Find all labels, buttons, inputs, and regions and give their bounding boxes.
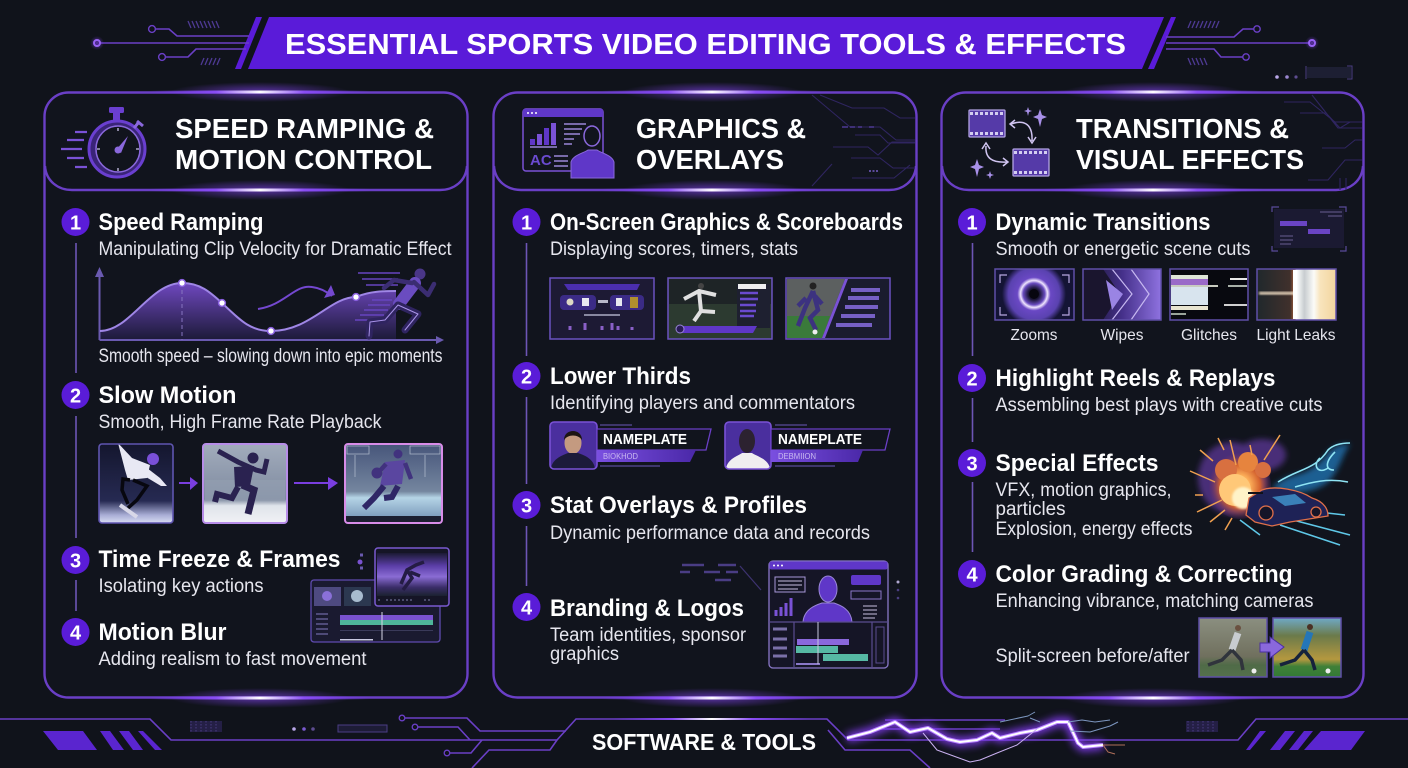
item: motion blur: Motion Blur (98, 619, 226, 646)
item: motion blur: Adding realism to fast movement (98, 649, 367, 670)
item: branding and logos: Branding & Logos (550, 595, 744, 622)
panel bottom glows (150, 688, 1263, 708)
item: branding and logos: Team identities, sponsor (550, 625, 747, 646)
item: motion blur (62, 618, 367, 670)
item: motion blur: 4 (70, 622, 82, 644)
lower third nameplate one: NAMEPLATE (603, 431, 687, 448)
icon: film frames with arrows and sparkles (969, 107, 1049, 179)
small transition widget (1272, 207, 1346, 251)
item: slow motion: 2 (70, 386, 81, 408)
item: special effects: 3 (966, 454, 978, 476)
item: highlight reels: Assembling best plays with creative cuts (996, 395, 1322, 416)
icon: stopwatch (61, 107, 145, 177)
chart caption: Smooth speed – slowing down into epic moments (98, 346, 442, 367)
panel heading: VISUAL EFFECTS (1076, 144, 1304, 175)
lower third nameplate two (725, 422, 890, 469)
title banner: ESSENTIAL SPORTS VIDEO EDITING TOOLS & EFFECTS (285, 29, 1126, 61)
item: special effects: VFX, motion graphics, (996, 480, 1172, 501)
item: on-screen graphics: 1 (521, 212, 532, 234)
thumbnail labels (1010, 327, 1336, 344)
item: highlight reels (958, 364, 1322, 442)
frame: ice skater (203, 444, 287, 523)
item: highlight reels: Highlight Reels & Replays (996, 365, 1276, 392)
footer left stripes (43, 731, 162, 750)
item: color grading: Split-screen before/after (996, 646, 1190, 667)
panel: graphics and overlays (494, 82, 916, 698)
item: speed ramping: Speed Ramping (98, 209, 264, 236)
editor interface mockup (311, 548, 449, 642)
panel header: graphics (494, 82, 916, 200)
icon: runner (369, 268, 434, 336)
item: dynamic transitions: Dynamic Transitions (996, 209, 1210, 236)
circuit decoration left of title (90, 21, 249, 65)
image sequence: slow motion frames (99, 443, 442, 523)
lower third nameplate one: BIOKHOD (603, 452, 638, 461)
photo: after (1273, 618, 1341, 677)
panel heading (636, 113, 806, 175)
panel: transitions and visual effects (942, 82, 1364, 698)
item: stat overlays (512, 491, 870, 586)
footer label: SOFTWARE & TOOLS (592, 729, 816, 755)
thumbnail: player with stats list (668, 278, 772, 339)
thumbnail labels: Zooms (1010, 327, 1058, 344)
panel heading (175, 113, 434, 175)
item: speed ramping: Manipulating Clip Velocity for Dramatic Effect (98, 239, 452, 260)
item: color grading: 4 (966, 564, 978, 586)
item: lower thirds: Lower Thirds (550, 363, 691, 390)
thumbnail labels: Wipes (1100, 327, 1144, 344)
item: branding and logos: 4 (521, 598, 533, 620)
icon: graphics screen with player (523, 109, 614, 178)
item: color grading (958, 560, 1314, 667)
item: on-screen graphics: Displaying scores, timers, stats (550, 239, 798, 260)
thumbnails: scoreboard overlays (550, 278, 890, 339)
panel heading: TRANSITIONS & (1076, 113, 1289, 144)
item: lower thirds: Identifying players and commentators (550, 393, 855, 414)
item: stat overlays: Stat Overlays & Profiles (550, 492, 807, 519)
footer small widgets (190, 721, 1218, 732)
item: branding and logos: graphics (550, 644, 619, 665)
item: on-screen graphics: On-Screen Graphics & Scoreboards (550, 209, 903, 236)
item: on-screen graphics (512, 208, 903, 356)
footer bar (0, 712, 1408, 768)
icon: graphics screen with player: AC (530, 152, 552, 169)
item: special effects: Explosion, energy effects (996, 519, 1192, 540)
panel heading: OVERLAYS (636, 144, 784, 175)
footer right stripes (1246, 731, 1365, 750)
thumbnail labels: Light Leaks (1256, 327, 1336, 344)
item: slow motion (62, 381, 382, 538)
item: stat overlays: 3 (521, 496, 532, 518)
item: time freeze and frames (62, 546, 340, 611)
panel header: transitions (942, 82, 1363, 200)
item: branding and logos (512, 593, 747, 665)
thumbnail: scoreboard (550, 278, 654, 339)
item: time freeze and frames: Time Freeze & Frames (98, 546, 340, 573)
panel heading: GRAPHICS & (636, 113, 806, 144)
lightning effect (847, 712, 1125, 762)
panel heading (1076, 113, 1304, 175)
illustration: explosion and race car (1190, 435, 1350, 545)
frame: jumping skater (99, 443, 173, 523)
broadcast interface mockup (680, 561, 900, 668)
frame: basketball player (345, 444, 442, 523)
photo: before (1199, 618, 1267, 677)
title banner (235, 17, 1176, 69)
item: special effects (958, 449, 1192, 552)
lower third nameplate two: DEBMIION (778, 452, 816, 461)
thumbnail: glitches (1170, 269, 1248, 320)
item: special effects: Special Effects (996, 450, 1158, 477)
circuit decoration right of title (1166, 21, 1352, 79)
item: dynamic transitions: Smooth or energetic scene cuts (996, 239, 1250, 260)
lower third nameplate two: NAMEPLATE (778, 431, 862, 448)
thumbnail: wipes (1083, 269, 1161, 320)
thumbnail labels: Glitches (1181, 327, 1237, 344)
panel heading: MOTION CONTROL (175, 144, 432, 175)
item: speed ramping: 1 (70, 212, 81, 234)
chart: speed curve with runner (95, 267, 444, 344)
panel: speed ramping and motion control (44, 82, 468, 698)
lower third nameplate one (550, 422, 711, 469)
item: highlight reels: 2 (966, 368, 978, 390)
item: color grading: Enhancing vibrance, matching cameras (996, 591, 1314, 612)
item: stat overlays: Dynamic performance data and records (550, 523, 870, 544)
item: dynamic transitions (958, 208, 1250, 356)
item: dynamic transitions: 1 (966, 212, 978, 234)
item: lower thirds: 2 (521, 366, 532, 388)
item: slow motion: Slow Motion (98, 382, 236, 409)
before and after photos (1199, 618, 1341, 677)
panel header: speed ramping (45, 82, 467, 200)
arrow: before to after (1260, 637, 1284, 658)
item: speed ramping (62, 208, 452, 373)
thumbnail: player with list (786, 278, 890, 339)
thumbnail: light leaks (1257, 269, 1336, 320)
item: time freeze and frames: 3 (70, 550, 81, 572)
item: color grading: Color Grading & Correcting (996, 561, 1292, 588)
item: lower thirds (512, 362, 855, 484)
panel heading: SPEED RAMPING & (175, 113, 434, 144)
item: slow motion: Smooth, High Frame Rate Playback (98, 412, 382, 433)
thumbnail: zooms (994, 268, 1075, 321)
item: time freeze and frames: Isolating key actions (98, 576, 264, 597)
item: special effects: particles (996, 499, 1066, 520)
